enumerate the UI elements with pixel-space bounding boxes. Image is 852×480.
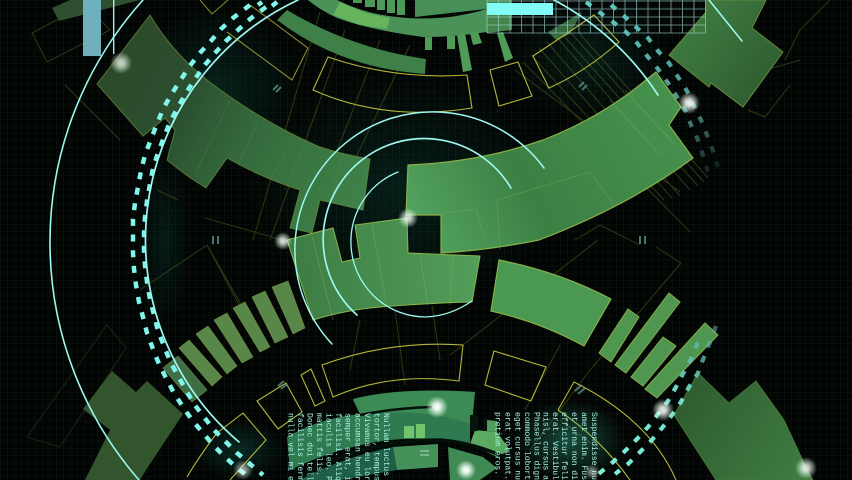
text block: left column: nulla vel mi e <box>286 413 294 480</box>
dashed ring: lower right inner <box>592 342 698 479</box>
lower centre block stripes <box>312 224 453 320</box>
text block: right column: eget cursus nu <box>512 412 522 480</box>
text block: left column: mattis felis. <box>314 413 323 476</box>
small grey tick marks <box>213 82 645 394</box>
panel: lower right segment <box>491 260 611 346</box>
text block: left column <box>286 413 390 480</box>
bars: right group <box>599 293 718 398</box>
text block: right column: amet enim. Fus <box>579 412 588 480</box>
text block: right column <box>492 412 598 480</box>
text block: left column: facilisi. Aliq <box>333 413 342 480</box>
panel: central right arc band <box>406 72 693 253</box>
yellow outline segments <box>187 0 676 480</box>
dashed ring: lower right outer <box>615 326 716 474</box>
panel: top arcs and teeth <box>277 0 582 74</box>
dashed ring: upper right outer <box>586 2 708 172</box>
text block: left column: iaculis leo. P <box>324 413 332 480</box>
panel: upper-left main arc band <box>97 15 370 233</box>
text block: left column: Vivamus eu lor <box>362 413 371 480</box>
text block: right column: erat. Vestibul <box>550 412 559 480</box>
text block: right column: erat volutpat. <box>502 412 512 480</box>
blue bar <box>83 0 101 56</box>
glow points <box>110 52 817 480</box>
band stripes <box>195 100 343 205</box>
text block: left column: facilisis ferm <box>295 413 304 480</box>
text block: right column: nisl, cursus a <box>540 412 550 480</box>
text block: left column: semper erat, i <box>342 413 352 480</box>
text block: right column: Phasellus dign <box>532 412 540 480</box>
grid box <box>487 0 706 33</box>
bars: left group <box>163 281 305 402</box>
panel: top right block <box>669 0 783 107</box>
text block: right column: pretium eros. <box>492 412 502 475</box>
dashed ring: top left tail <box>258 2 277 6</box>
dashed ring: upper right inner <box>611 5 718 167</box>
panel: bottom right block <box>674 373 813 480</box>
teal glow over text <box>515 400 625 480</box>
text block: left column: Nullam luctus <box>381 413 390 476</box>
panel: top left block <box>52 0 140 21</box>
dashed ring: left outer <box>133 5 250 477</box>
outlines inside central band <box>443 90 675 250</box>
panel: lower centre block <box>287 218 480 320</box>
text block: right column: Suspendisse nu <box>589 412 598 480</box>
text block: right column: commodo lobort <box>522 412 531 480</box>
text block: left column: accumsan hendr <box>352 413 362 480</box>
panel: bottom centre arcs <box>287 391 520 480</box>
thin vertical line <box>113 0 114 54</box>
text block: right column: efficitur feli <box>559 412 568 480</box>
text block: right column: et urna non di <box>569 412 578 480</box>
dashed ring: left inner <box>144 7 266 475</box>
text block: left column: Donec dui tell <box>304 413 314 480</box>
cyan status bar <box>487 3 553 15</box>
text block: left column: tortor, tempus <box>372 413 380 480</box>
panel: bottom left block <box>83 371 183 480</box>
